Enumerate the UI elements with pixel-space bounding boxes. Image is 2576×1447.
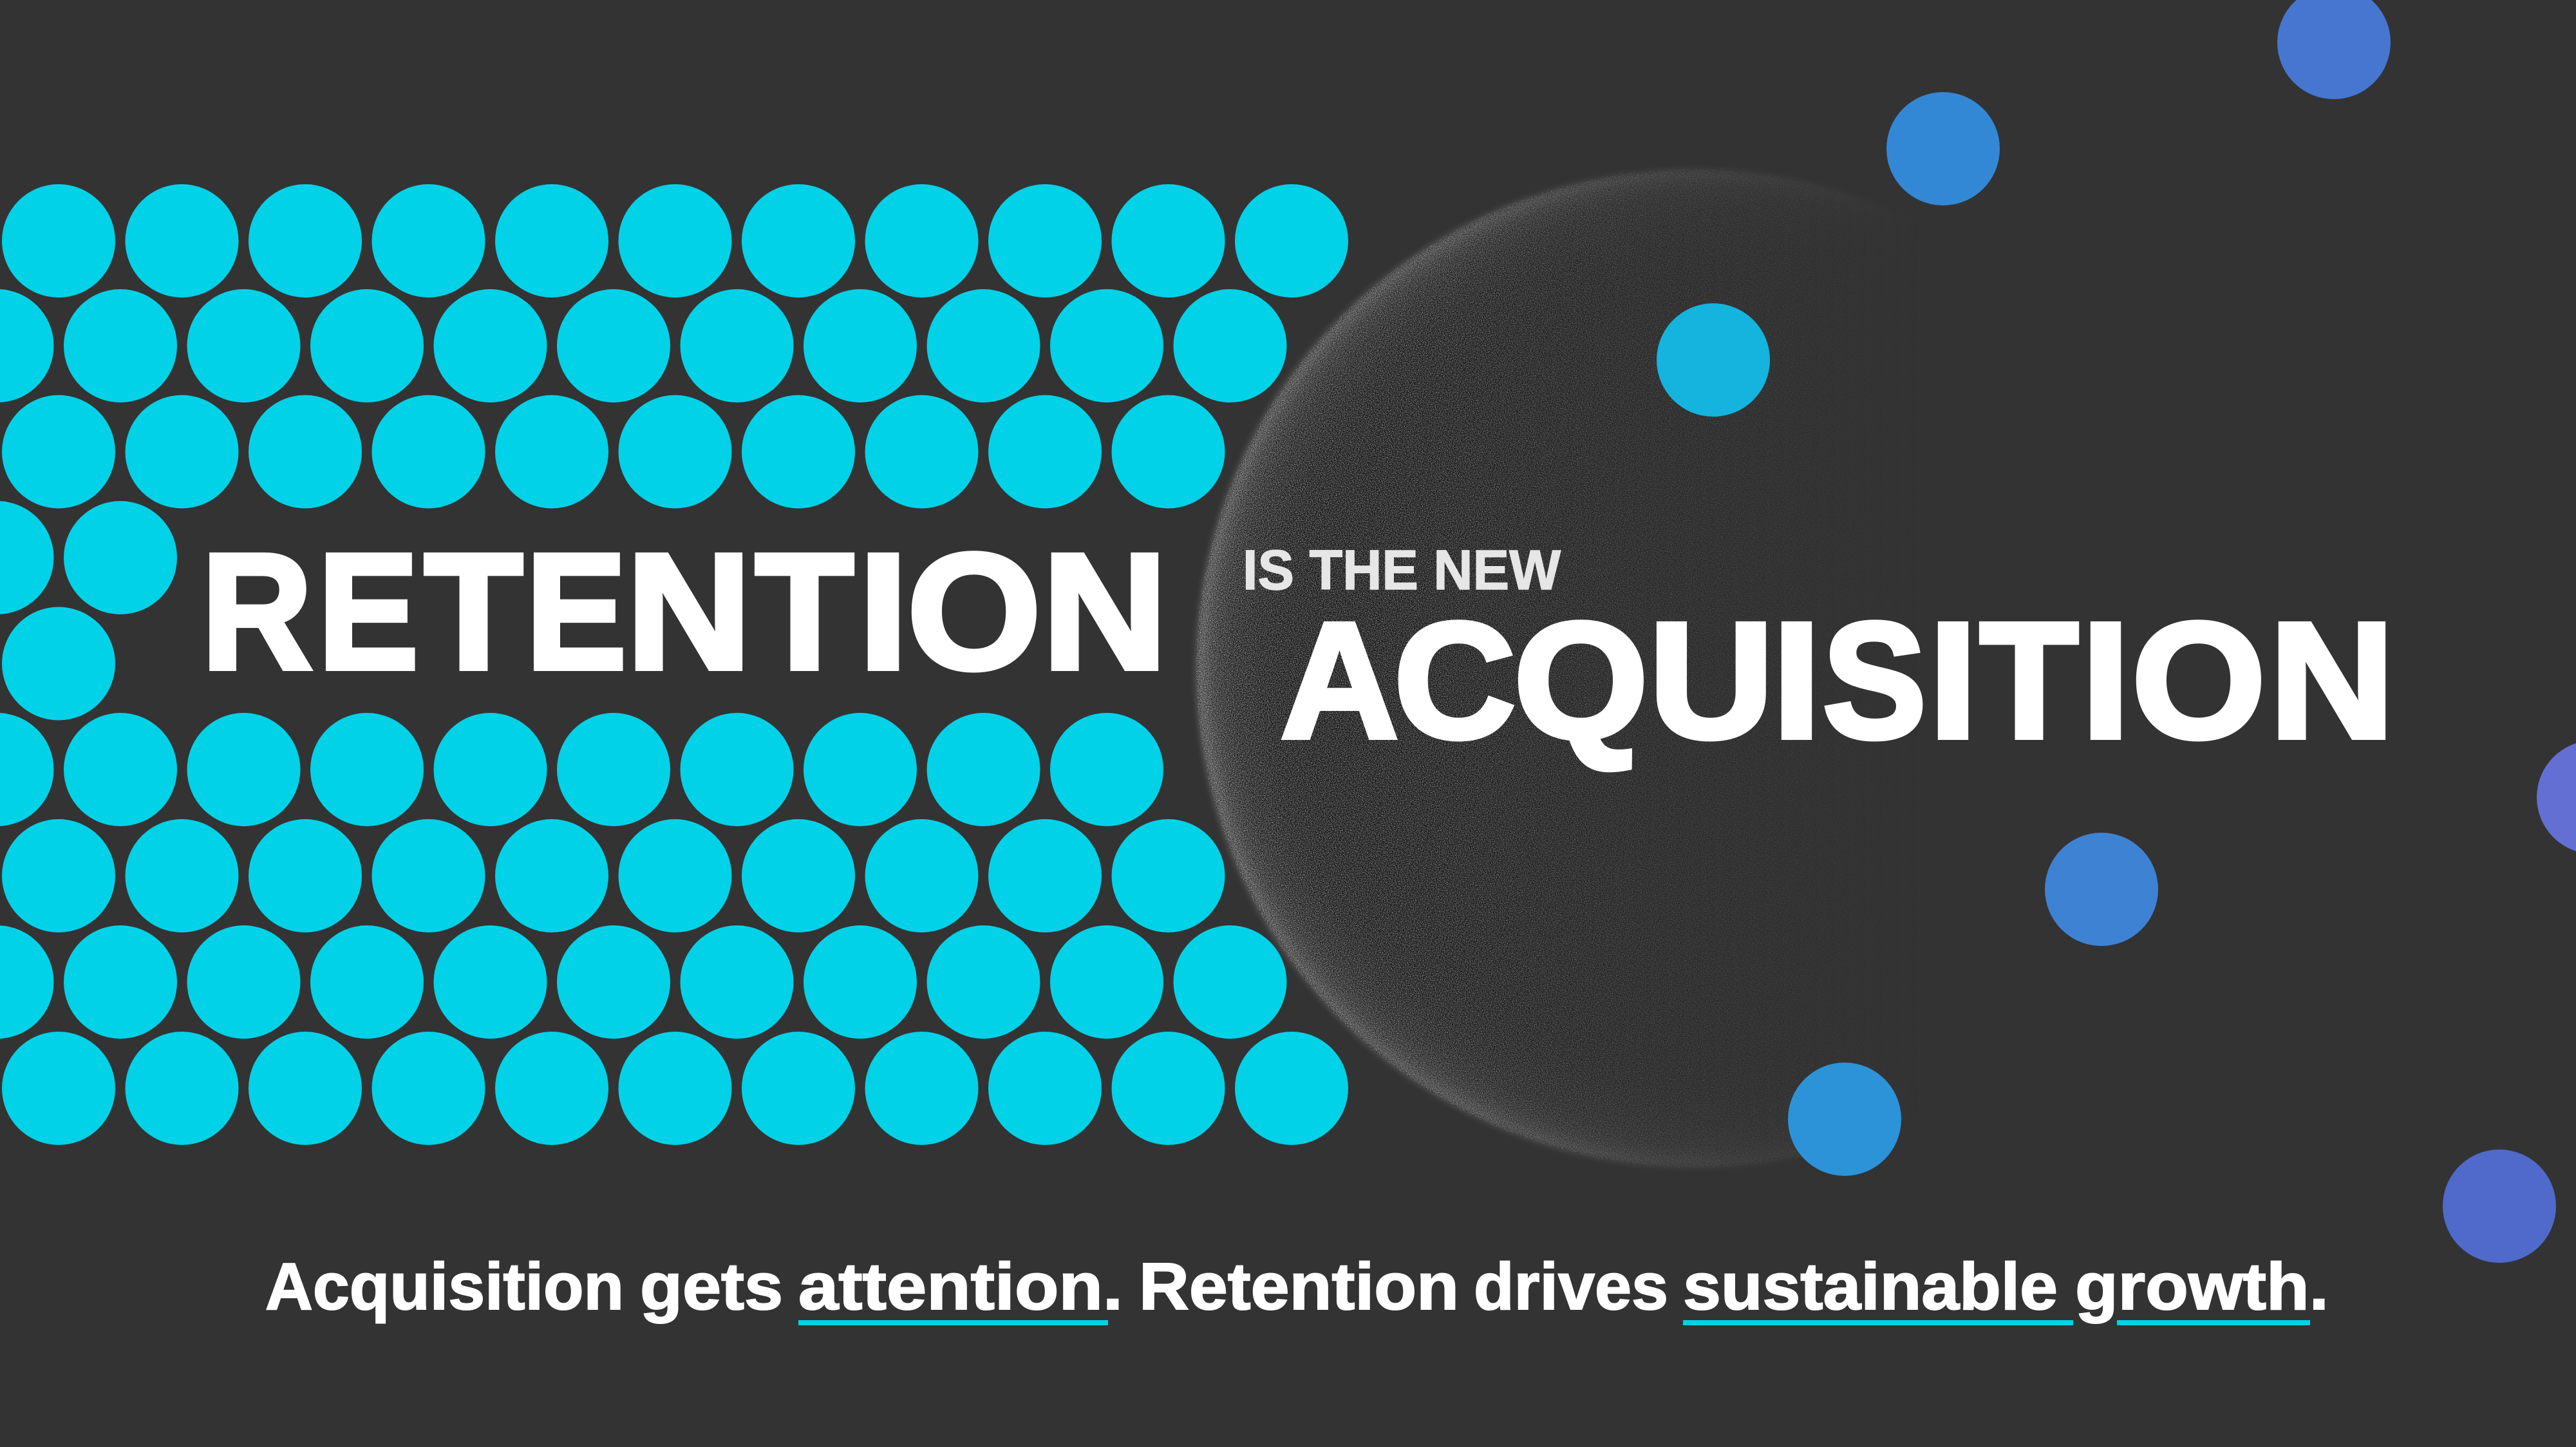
heading: ACQUISITION: Q [1514, 589, 1648, 773]
tagline: sustainable [1683, 1249, 2058, 1323]
heading: ACQUISITION: U [1649, 589, 1774, 773]
sphere grain texture [1196, 169, 1880, 1168]
heading: ACQUISITION: S [1823, 589, 1926, 773]
tagline: gets [640, 1249, 783, 1323]
tagline underlines [798, 1320, 2310, 1325]
sphere lit rim [1192, 169, 1834, 1168]
heading: ACQUISITION: O [2132, 589, 2266, 773]
scattered blue dots: acquired customers [1657, 0, 2576, 1263]
heading: ACQUISITION: N [2270, 589, 2394, 773]
cyan dot cluster: retained customers [0, 184, 1348, 1145]
heading: RETENTION: N [626, 520, 751, 704]
heading: RETENTION: E [318, 520, 418, 704]
grainy sphere [1192, 169, 1880, 1168]
heading: RETENTION: T [424, 520, 523, 704]
tagline: growth. [2075, 1249, 2329, 1323]
heading: RETENTION: E [526, 520, 626, 704]
heading: RETENTION: N [1042, 520, 1167, 704]
tagline: attention. [798, 1249, 1123, 1323]
heading: RETENTION: T [755, 520, 854, 704]
heading: RETENTION: R [202, 520, 312, 704]
tagline: drives [1474, 1249, 1668, 1323]
heading: ACQUISITION: I [1929, 589, 1977, 773]
heading: ACQUISITION: I [2082, 589, 2130, 773]
tagline [265, 1249, 2329, 1323]
heading: RETENTION: O [907, 520, 1041, 704]
tagline: Acquisition [265, 1249, 624, 1323]
heading: RETENTION: I [859, 520, 908, 704]
subheading: IS THE NEW: IS THE NEW [1243, 539, 1561, 601]
heading: ACQUISITION: T [1980, 589, 2078, 773]
heading: ACQUISITION: A [1281, 589, 1398, 773]
tagline: Retention [1139, 1249, 1459, 1323]
heading: ACQUISITION: I [1772, 589, 1821, 773]
heading: ACQUISITION: C [1394, 589, 1516, 773]
